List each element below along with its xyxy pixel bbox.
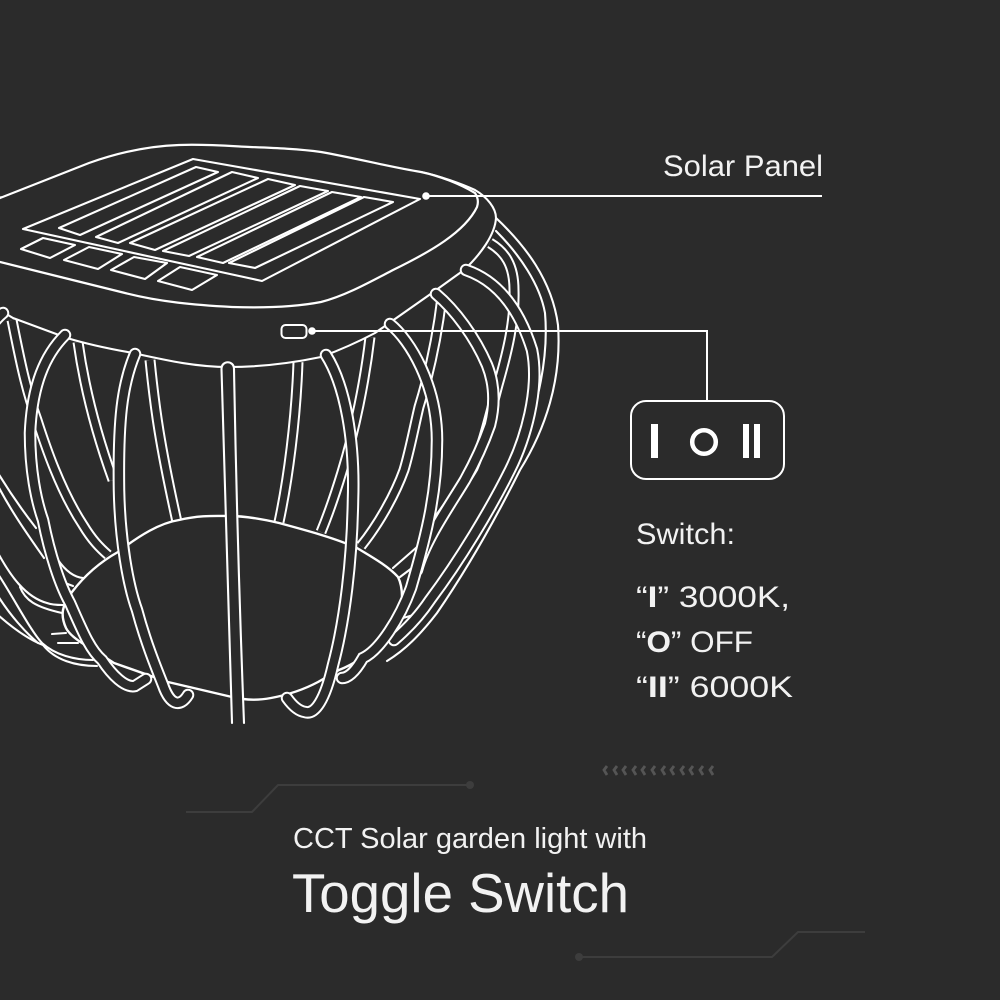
lantern top surface (0, 145, 478, 307)
leader line: switch (308, 327, 707, 401)
decorative circuit trace: upper left (186, 781, 474, 812)
front ropes of the lantern cage (0, 270, 534, 723)
lantern rim body (0, 172, 496, 367)
text: OFF: “O” OFF (636, 626, 753, 659)
solar panel (21, 159, 420, 290)
decorative circuit trace: lower right (575, 932, 865, 961)
illustration: solar garden light (0, 145, 559, 723)
lantern base shade (63, 516, 402, 700)
text: 3000K: “I” 3000K, (636, 581, 790, 614)
toggle switch on lantern (282, 325, 306, 338)
label: Solar Panel: Solar Panel (663, 150, 823, 183)
leader line: solar panel (422, 192, 822, 200)
back ropes of the lantern cage (0, 217, 559, 666)
decorative chevrons (604, 766, 713, 775)
subtitle: CCT Solar garden light with (293, 823, 647, 855)
title: Toggle Switch (292, 862, 629, 924)
switch icon panel (631, 401, 784, 479)
icon: position O (692, 430, 716, 454)
icon: position I (651, 424, 658, 458)
text: 6000K: “II” 6000K (636, 671, 793, 704)
switch description (636, 518, 793, 704)
heading: Switch: Switch: (636, 518, 735, 551)
icon: position II (743, 424, 760, 458)
